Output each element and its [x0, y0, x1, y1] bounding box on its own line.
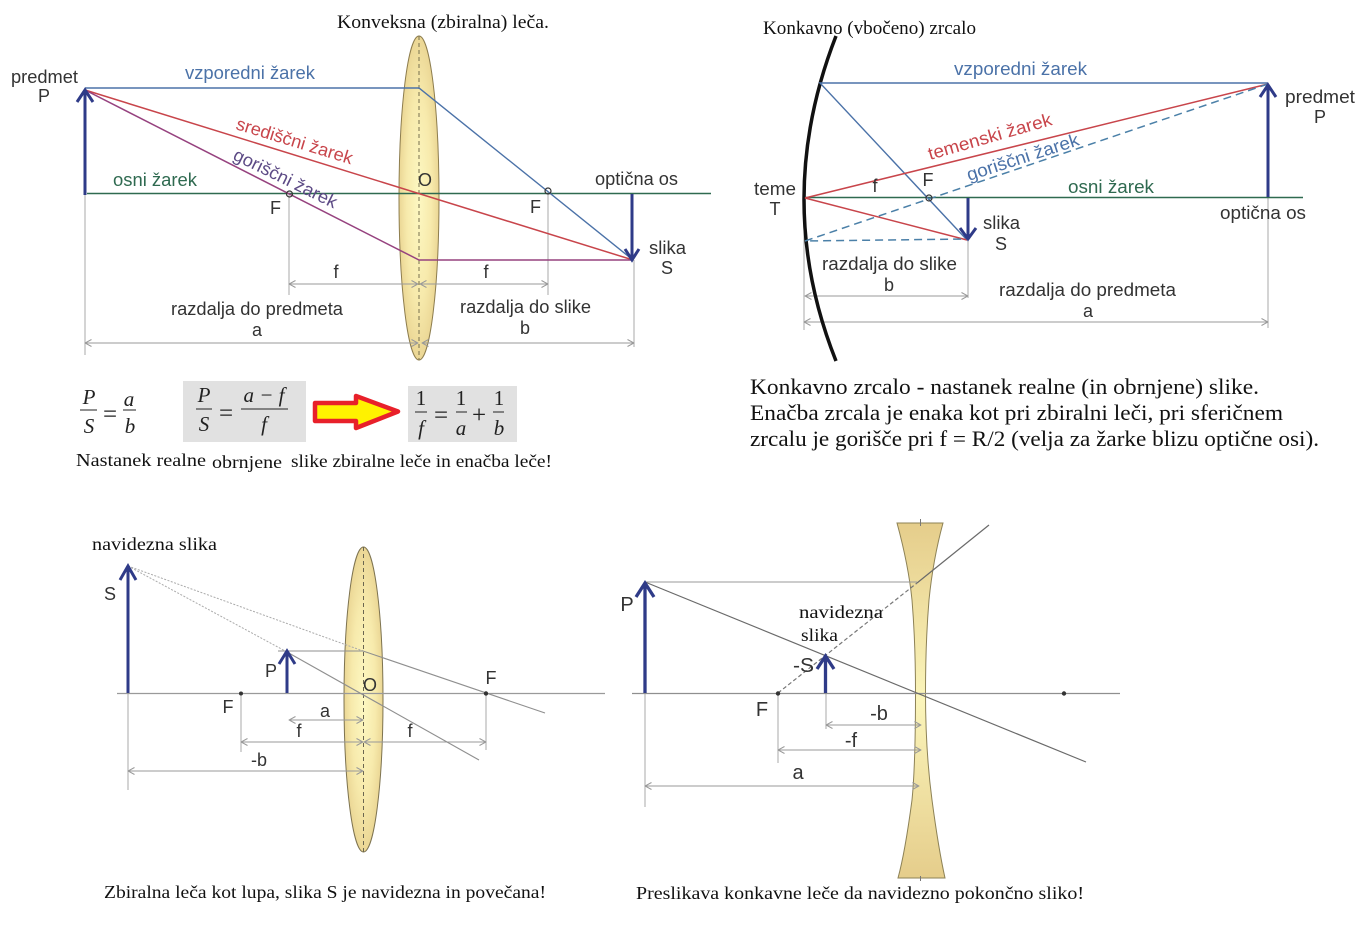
labels: a: [320, 701, 331, 721]
dimension lines: [128, 693, 486, 790]
refracted ray: [917, 525, 989, 583]
labels: a: [792, 762, 804, 784]
focus points: [776, 691, 1066, 696]
labels: F: [530, 197, 541, 217]
optical axis: [632, 692, 1120, 694]
optical axis: [117, 692, 605, 694]
arrow: image S: [625, 194, 639, 260]
central ray: [645, 582, 1086, 762]
labels: goriščni žarek: [964, 129, 1083, 185]
formula box: P/S = (a-f)/f: P: [197, 383, 211, 407]
arrow: object P: [1260, 85, 1276, 197]
text block: mirror explanation: [750, 374, 1319, 451]
labels: [754, 59, 1355, 321]
caption: real image: Nastanek realne: [76, 450, 206, 470]
labels: slika: [649, 238, 687, 258]
labels: P: [620, 594, 634, 616]
central ray: [287, 652, 479, 760]
arrow: virtual image -S: [817, 656, 834, 693]
caption: concave lens: Preslikava konkavne leče da navidezno pokončno sliko!: [636, 883, 1084, 903]
labels: -S: [793, 655, 814, 677]
formula box: 1/f = 1/a + 1/b: 1: [416, 386, 426, 410]
formula: P/S = a/b: [80, 385, 136, 438]
arrow: image S: [960, 198, 976, 239]
convex lens shape: [399, 36, 439, 360]
labels: S: [661, 258, 673, 278]
labels: f: [296, 721, 302, 741]
dimension lines: [804, 197, 1268, 330]
labels: [11, 63, 687, 340]
panel: magnifier: [92, 534, 605, 902]
formula box: 1/f = 1/a + 1/b: [408, 386, 517, 442]
labels: f: [483, 262, 489, 282]
formula: P/S = a/b: S: [84, 414, 95, 438]
text block: mirror explanation: zrcalu je gorišče pri f = R/2 (velja za žarke blizu optične osi).: [750, 426, 1319, 451]
heading: concave mirror: Konkavno (vbočeno) zrcalo: [763, 18, 976, 39]
dimension lines: [645, 693, 921, 807]
labels: [104, 584, 496, 770]
labels: O: [418, 170, 432, 190]
labels: F: [756, 699, 768, 721]
parallel ray: [645, 581, 917, 583]
formula box: P/S = (a-f)/f: f: [261, 412, 270, 436]
formula box: 1/f = 1/a + 1/b: b: [494, 416, 504, 440]
labels: P: [1314, 107, 1326, 127]
labels: središčni žarek: [234, 114, 356, 168]
panel: lens equation: [76, 381, 552, 472]
labels: temenski žarek: [926, 109, 1055, 164]
focus point: [926, 195, 932, 201]
parallel ray: [278, 651, 545, 713]
formula: P/S = a/b: a: [124, 387, 134, 411]
arrow: yellow implication: [315, 396, 398, 428]
optical axis: [805, 196, 1303, 198]
labels: -b: [251, 750, 267, 770]
formula box: P/S = (a-f)/f: a − f: [243, 383, 288, 407]
labels: S: [995, 234, 1007, 254]
heading: convex lens: Konveksna (zbiralna) leča.: [337, 12, 549, 33]
labels: F: [922, 170, 934, 190]
formula box: P/S = (a-f)/f: S: [199, 412, 210, 436]
arrow: virtual image S: [120, 566, 136, 693]
labels: T: [770, 199, 780, 219]
labels: O: [363, 675, 377, 695]
labels: osni žarek: [113, 170, 198, 190]
label: virtual image: navidezna: [799, 602, 883, 622]
labels: P: [265, 661, 277, 681]
parallel ray: [820, 83, 1268, 240]
formula box: 1/f = 1/a + 1/b: a: [456, 416, 466, 440]
labels: P: [38, 86, 50, 106]
labels: [620, 594, 888, 784]
labels: F: [222, 697, 234, 717]
formula box: P/S = (a-f)/f: =: [219, 400, 233, 427]
formula: P/S = a/b: =: [103, 401, 117, 428]
labels: F: [486, 668, 496, 688]
labels: a: [1083, 301, 1094, 321]
labels: vzporedni žarek: [954, 59, 1088, 79]
virtual ray dashed: [778, 583, 917, 693]
formula box: 1/f = 1/a + 1/b: =: [434, 402, 448, 429]
concave mirror curve: [804, 36, 836, 361]
focus points: [239, 691, 488, 696]
formula box: 1/f = 1/a + 1/b: 1: [456, 386, 466, 410]
heading: virtual image: navidezna slika: [92, 534, 217, 554]
dimension lines: [85, 194, 634, 355]
labels: predmet: [11, 67, 78, 87]
focal ray dashed: [805, 84, 1268, 241]
caption: real image: [76, 450, 552, 472]
panel: concave mirror: [750, 18, 1355, 451]
vertex ray: [805, 84, 1268, 240]
caption: real image: obrnjene: [212, 452, 282, 472]
labels: slika: [983, 213, 1021, 233]
text block: mirror explanation: Enačba zrcala je enaka kot pri zbiralni leči, pri sferičnem: [750, 400, 1283, 425]
labels: optična os: [595, 169, 678, 189]
labels: -b: [870, 703, 888, 725]
arrow: object P: [636, 583, 654, 693]
labels: f: [872, 176, 878, 196]
labels: razdalja do slike: [460, 297, 591, 317]
labels: F: [270, 198, 281, 218]
labels: razdalja do predmeta: [171, 299, 344, 319]
concave lens shape: [897, 519, 945, 881]
labels: b: [520, 318, 530, 338]
formula box: 1/f = 1/a + 1/b: 1: [494, 386, 504, 410]
focal ray: [85, 90, 633, 260]
optical axis: [87, 192, 711, 194]
focus points: [286, 188, 551, 197]
caption: real image: slike zbiralne leče in enačba leče!: [291, 451, 552, 471]
virtual rays dotted: [128, 566, 363, 652]
labels: razdalja do slike: [822, 254, 957, 274]
label: virtual image: slika: [801, 625, 838, 645]
parallel ray: [85, 88, 633, 260]
formula box: 1/f = 1/a + 1/b: f: [418, 416, 427, 440]
labels: S: [104, 584, 116, 604]
labels: f: [333, 262, 339, 282]
panel: concave lens: [620, 519, 1120, 903]
formula box: P/S = (a-f)/f: [183, 381, 306, 442]
convex lens shape: [344, 547, 383, 852]
labels: b: [884, 275, 894, 295]
caption: magnifier: Zbiralna leča kot lupa, slika S je navidezna in povečana!: [104, 882, 546, 902]
arrow: object P: [77, 90, 93, 195]
labels: teme: [754, 179, 796, 199]
labels: f: [407, 721, 413, 741]
formula: P/S = a/b: b: [125, 414, 135, 438]
text block: mirror explanation: Konkavno zrcalo - nastanek realne (in obrnjene) slike.: [750, 374, 1259, 399]
labels: goriščni žarek: [230, 145, 341, 213]
formula: P/S = a/b: P: [82, 385, 96, 409]
labels: a: [252, 320, 263, 340]
labels: osni žarek: [1068, 177, 1155, 197]
labels: razdalja do predmeta: [999, 280, 1177, 300]
central ray: [85, 90, 633, 260]
labels: predmet: [1285, 87, 1355, 107]
arrow: object P: [279, 651, 295, 693]
formula box: 1/f = 1/a + 1/b: +: [472, 402, 486, 429]
labels: vzporedni žarek: [185, 63, 316, 83]
labels: optična os: [1220, 203, 1306, 223]
labels: -f: [845, 730, 858, 752]
panel: convex lens real image: [11, 12, 711, 360]
label: virtual image: [799, 602, 883, 645]
